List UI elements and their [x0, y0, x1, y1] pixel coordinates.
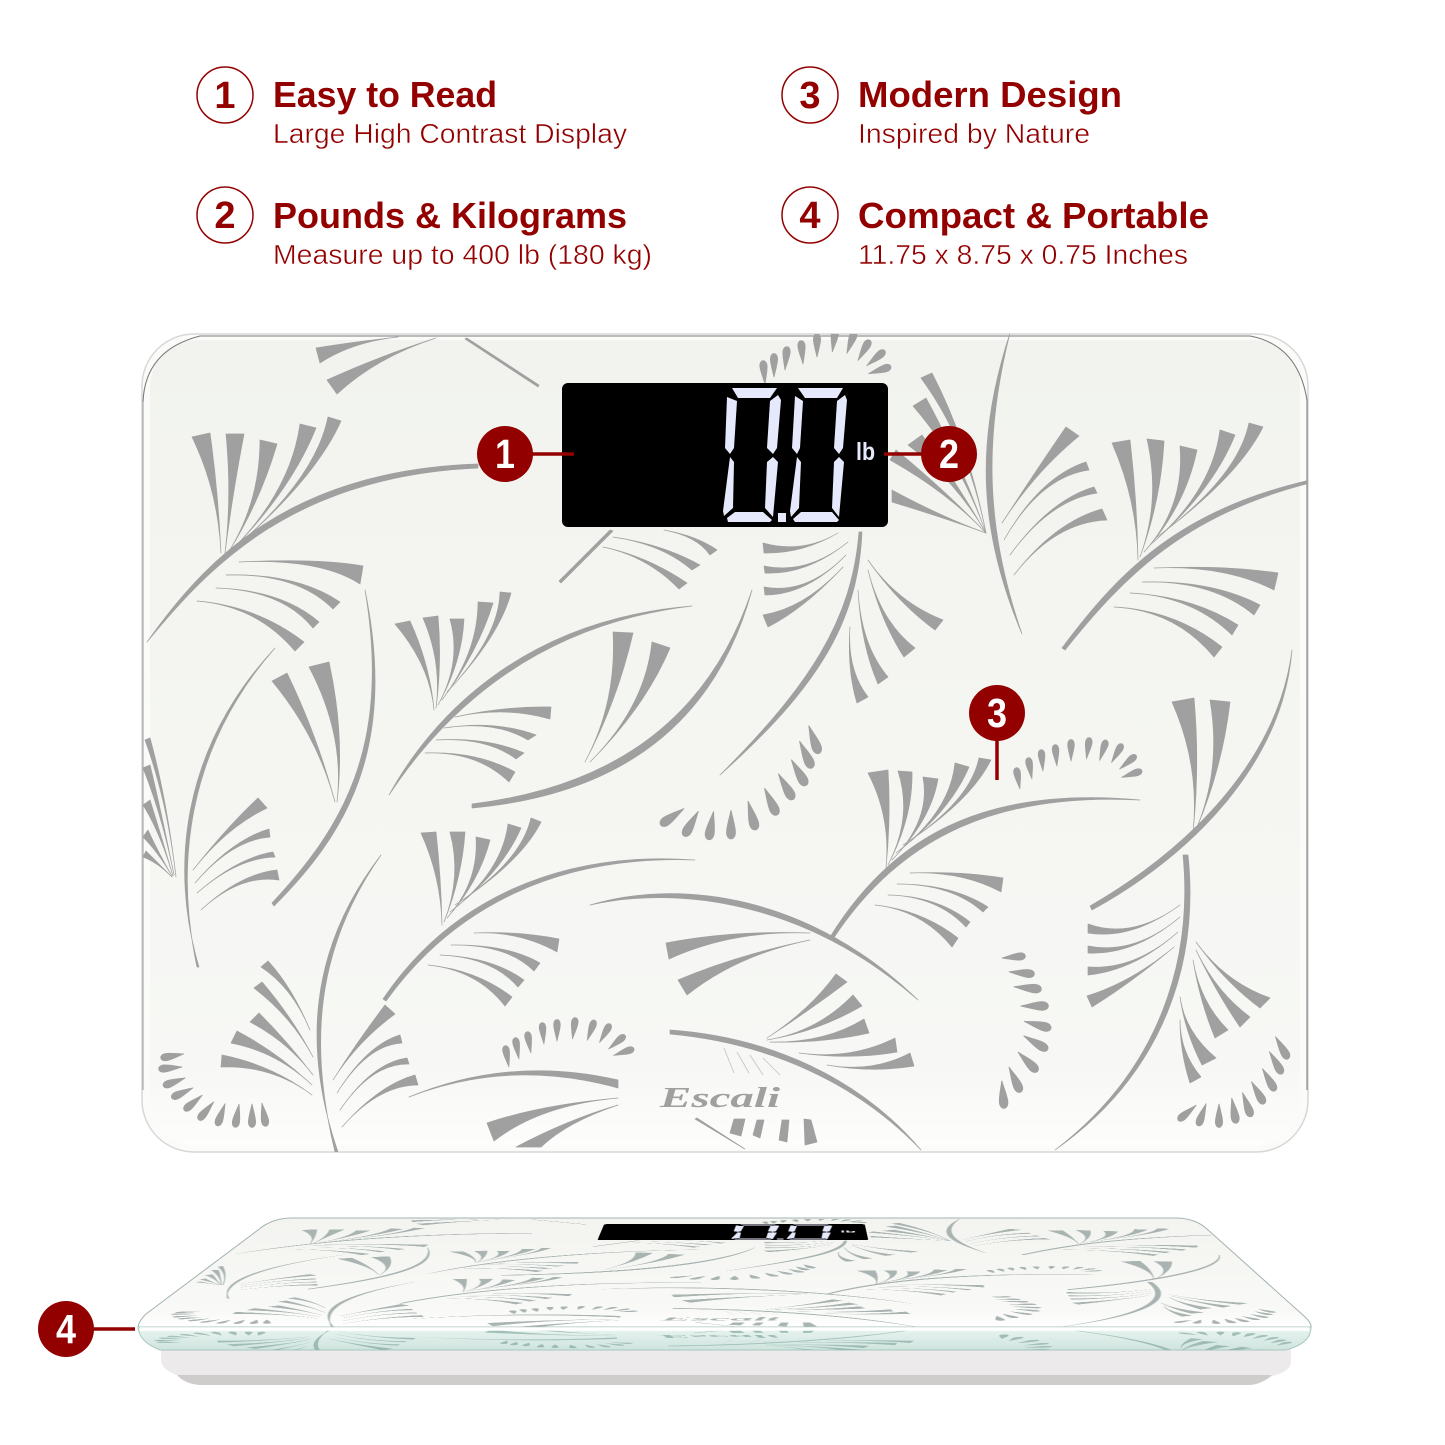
feature 2: Pounds & Kilograms — [273, 195, 627, 236]
teardrop arc: bottom right — [1176, 1035, 1292, 1127]
leaf fan: lower right right of stem — [1180, 942, 1270, 1083]
teardrop arc: bottom center — [502, 1017, 635, 1067]
leaf pair: right — [1172, 698, 1230, 832]
leaf stubs: bottom center — [730, 1119, 817, 1145]
leaf fan: under display — [603, 530, 717, 589]
leaf pair: center bottom — [666, 932, 810, 995]
pale fine lines — [724, 1048, 780, 1075]
leaf pair: left — [272, 662, 340, 802]
leaf fan: left — [193, 798, 279, 910]
feature 1: Large High Contrast Display — [273, 118, 627, 149]
feature 2: Measure up to 400 lb (180 kg) — [273, 239, 652, 270]
feature 1 — [197, 67, 627, 149]
callout 1: 1 — [495, 431, 515, 477]
callout 4 — [38, 1301, 135, 1357]
teardrop arc: bottom left — [158, 1050, 270, 1128]
unit label: lb — [856, 438, 875, 466]
leaf fan: top right lower — [1114, 567, 1278, 657]
digit zero — [723, 388, 781, 522]
teardrop arc: center — [658, 724, 823, 840]
glass edge highlight — [140, 1327, 1309, 1331]
upper section: headings, scale face, callouts — [38, 66, 1309, 1357]
scale glass plate — [142, 334, 1308, 1152]
leaf fan: lower center upper — [421, 818, 541, 925]
feature 3: Modern Design — [858, 74, 1122, 115]
feature 1: Easy to Read — [273, 74, 497, 115]
scale glass top surface — [138, 1218, 1311, 1328]
leaf fan: upper center right of stem — [1002, 427, 1107, 575]
leaf fan: lower left of stem — [221, 961, 313, 1095]
leaf fan: top right upper — [1112, 423, 1263, 560]
leaf fan: lower center lower — [428, 933, 559, 1006]
perspective pattern on lower scale — [170, 1219, 1277, 1328]
leaf fan: bottom center right — [767, 974, 914, 1069]
leaf fan: top edge — [316, 337, 436, 394]
feature 4: 4 — [799, 195, 821, 237]
leaf fan: below display right — [849, 560, 943, 703]
leaf fan: upper center left of stem — [890, 373, 986, 533]
leaf fan: center left lower — [425, 707, 551, 782]
leaf pair: center — [585, 632, 670, 762]
digit zero second — [790, 388, 847, 522]
scale base tray — [161, 1348, 1291, 1385]
callout 3 — [969, 685, 1025, 780]
leaf fan: top left lower — [197, 561, 363, 651]
callout 1 — [477, 426, 574, 482]
callout 4: 4 — [56, 1306, 76, 1352]
feature 1: 1 — [214, 75, 236, 117]
callout 3: 3 — [987, 690, 1007, 736]
teardrop arc: above display — [759, 328, 892, 384]
leaf fan: center upper right — [868, 758, 991, 868]
decimal point — [778, 513, 786, 522]
floral pattern — [143, 328, 1310, 1152]
feature 4: 11.75 x 8.75 x 0.75 Inches — [858, 239, 1188, 270]
feature 2: 2 — [214, 195, 236, 237]
feature 4 — [782, 187, 1209, 270]
feature 2 — [197, 187, 652, 270]
teardrop arc: lower right center — [998, 952, 1052, 1109]
leaf fan: below display left — [763, 533, 848, 627]
reflected pattern in glass edge — [154, 1330, 1292, 1350]
digital display — [562, 383, 888, 527]
callout 2: 2 — [939, 431, 959, 477]
teardrop arc: near callout 3 — [1013, 737, 1143, 789]
leaf fan: center left upper — [395, 592, 511, 710]
feature 4: Compact & Portable — [858, 195, 1209, 236]
feature 3: 3 — [799, 75, 821, 117]
leaf fan: lower right of stem — [333, 1005, 418, 1127]
leaf fan: top left upper — [192, 417, 341, 553]
brand logo: Escali — [658, 1082, 780, 1114]
stems — [147, 333, 1310, 1152]
scale glass front edge — [138, 1327, 1311, 1350]
leaf fan: center lower right — [875, 873, 1003, 947]
leaf group: bottom center — [409, 1071, 618, 1147]
callout 2 — [884, 426, 977, 482]
feature 3 — [782, 67, 1122, 149]
feature 3: Inspired by Nature — [858, 118, 1090, 149]
leaf fan: lower right left of stem — [1087, 905, 1180, 1007]
leaf fan: left edge — [143, 738, 176, 877]
